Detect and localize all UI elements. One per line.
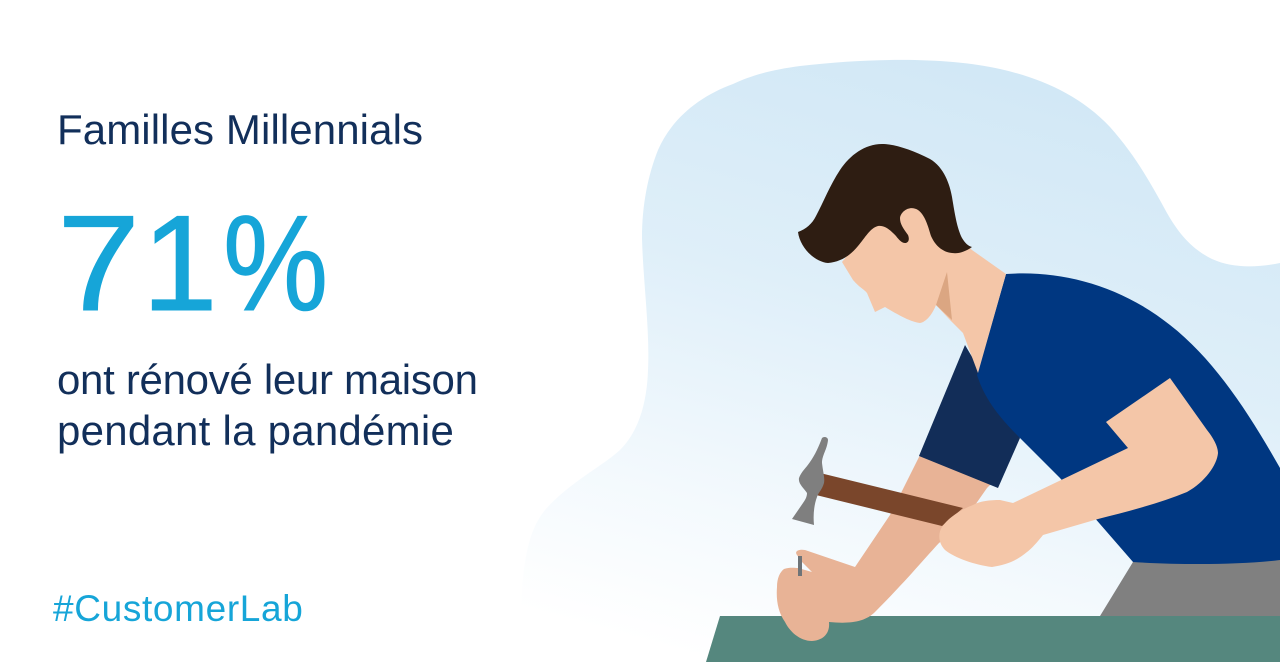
man's face and neck <box>842 205 1006 373</box>
background blob <box>520 60 1280 662</box>
hashtag: #CustomerLab <box>53 588 304 629</box>
blue t-shirt <box>977 273 1280 564</box>
far arm and hand <box>777 445 1000 641</box>
description text: ont rénové leur maison <box>57 356 478 403</box>
hammer handle <box>816 473 963 526</box>
hammer head <box>792 437 828 525</box>
statistic: 71%: % <box>223 187 328 339</box>
far sleeve <box>919 345 1020 488</box>
man's hair <box>798 144 972 263</box>
nail <box>798 556 802 576</box>
heading: Familles Millennials <box>57 106 423 153</box>
table <box>706 616 1280 662</box>
description text <box>57 356 478 454</box>
description text: pendant la pandémie <box>57 407 454 454</box>
statistic: 71% <box>57 187 328 339</box>
neck shadow <box>936 272 952 320</box>
statistic: 71%: 7 <box>57 187 140 339</box>
near arm and hand <box>939 378 1218 567</box>
statistic: 71%: 1 <box>142 187 218 339</box>
man's trousers <box>1100 560 1280 616</box>
